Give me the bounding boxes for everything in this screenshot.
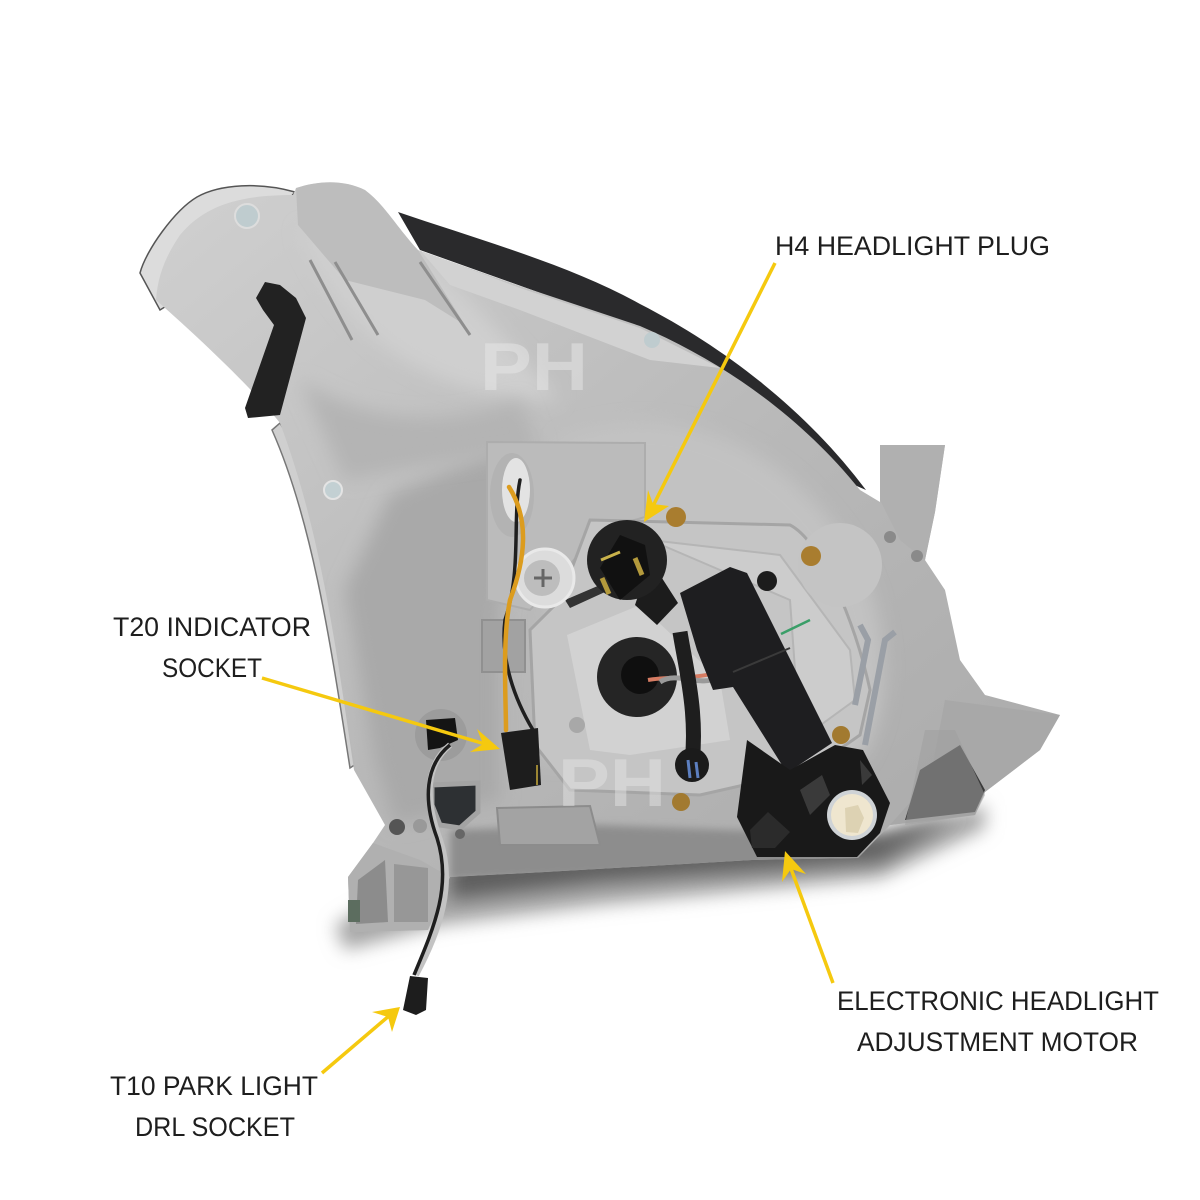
label: T20 indicator socket xyxy=(113,612,311,683)
adjustment motor xyxy=(737,740,890,857)
indicator wires xyxy=(504,480,533,730)
side tab upper right xyxy=(880,445,945,560)
label: electronic headlight adjustment motor: ADJUSTMENT MOTOR xyxy=(857,1027,1138,1057)
lower-left mounting bracket xyxy=(348,843,450,932)
corrugated loom xyxy=(675,632,709,782)
T10 wires xyxy=(414,745,450,975)
T20 indicator socket xyxy=(501,728,541,790)
lower shelf xyxy=(497,806,600,845)
clip tabs left of plate xyxy=(482,620,525,672)
wire hole xyxy=(490,453,534,537)
watermark lower PH: PH xyxy=(558,745,666,821)
watermark upper PH: PH xyxy=(480,329,588,405)
label: electronic headlight adjustment motor xyxy=(837,986,1159,1057)
label: T20 indicator socket: T20 INDICATOR xyxy=(113,612,311,642)
bulb cover plate xyxy=(530,520,882,795)
headlight housing body xyxy=(156,182,1060,932)
floor shadow xyxy=(335,805,985,950)
upright ribs xyxy=(855,625,895,745)
label: T10 park light DRL socket: T10 PARK LIGHT xyxy=(110,1071,318,1101)
upper ribs xyxy=(310,260,470,340)
infographic: headlight rear view with labelled connectors xyxy=(110,182,1158,1136)
label: electronic headlight adjustment motor: ELECTRONIC HEADLIGHT xyxy=(837,986,1159,1016)
right mounting bracket xyxy=(890,700,1060,825)
screws xyxy=(235,204,923,811)
arrow: T20 indicator socket xyxy=(262,678,500,752)
adjuster bolt xyxy=(516,549,605,608)
lens edge top-left xyxy=(140,186,295,310)
black bezel strip xyxy=(398,212,866,490)
arrow: adjustment motor xyxy=(782,851,833,983)
H4 plug xyxy=(587,520,678,625)
raised box around wire hole xyxy=(487,442,645,610)
arrow: T10 park light xyxy=(322,1007,400,1073)
control module xyxy=(680,567,832,773)
park light socket hole and bump xyxy=(389,709,478,839)
green mark and blue wire xyxy=(698,620,810,675)
rubber boot top-left xyxy=(245,282,306,418)
label: T10 park light DRL socket: DRL SOCKET xyxy=(135,1112,295,1142)
label: H4 headlight plug: H4 HEADLIGHT PLUG xyxy=(775,231,1050,261)
arrow: H4 headlight plug xyxy=(644,263,775,522)
body shading xyxy=(296,182,884,880)
label: T20 indicator socket: SOCKET xyxy=(162,653,262,683)
grommet and coloured wires xyxy=(597,637,720,717)
T10 park light socket xyxy=(403,976,428,1015)
label: T10 park light DRL socket xyxy=(110,1071,318,1142)
lens edge lower-left xyxy=(272,423,362,768)
